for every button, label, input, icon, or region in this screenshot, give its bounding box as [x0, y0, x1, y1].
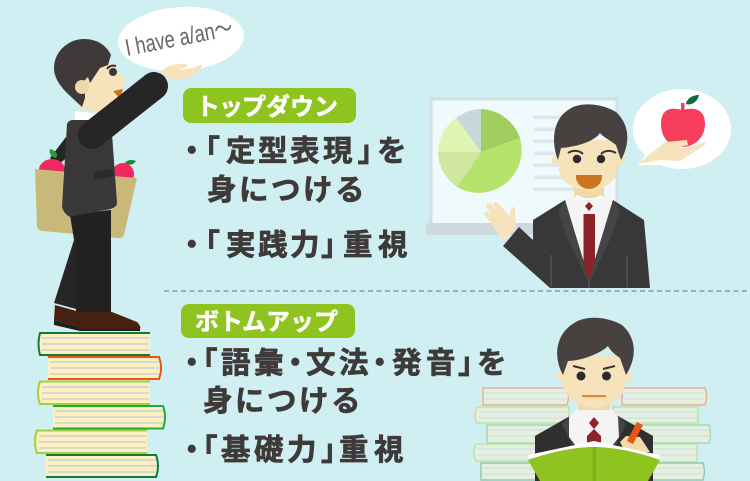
text block: top down points: ・「定型表現」を [177, 135, 407, 168]
apples in basket [39, 149, 136, 185]
text block: bottom up points: ・「基礎力」重視 [177, 434, 404, 467]
open book [528, 441, 660, 459]
reading man suit [535, 416, 653, 481]
reading man head [578, 395, 610, 410]
presenter waving hand [485, 202, 516, 241]
text block: bottom up points: ・「語彙・文法・発音」を [177, 347, 507, 380]
pencil [627, 422, 643, 444]
text block: top down points: ・「実践力」重視 [177, 229, 408, 262]
illustration: presentation board with pie chart [426, 99, 617, 235]
book 5 [35, 430, 147, 453]
badge: top down: トップダウン [196, 93, 338, 121]
reading man tie [587, 417, 601, 444]
left stack [474, 388, 569, 480]
illustration: reading man with open book [528, 318, 660, 481]
badge: bottom up: ボトムアップ [195, 309, 338, 336]
raised arm [92, 86, 154, 135]
jacket [62, 120, 117, 217]
shirt collar [75, 111, 99, 120]
trousers [54, 210, 111, 312]
presenter head [574, 180, 604, 198]
text block: bottom up points: 身につける [203, 385, 361, 418]
presenter suit [503, 200, 650, 288]
text block: bottom up points [177, 347, 507, 467]
ear, face and hair [78, 63, 126, 112]
text block: top down points: 身につける [207, 174, 365, 207]
badge: top down [183, 88, 356, 123]
speech bubble: I have a/an: I have a/an〜 [123, 15, 235, 62]
book 3 [38, 382, 150, 404]
hand [620, 436, 650, 452]
right stack [613, 388, 710, 480]
book 4 [53, 406, 165, 428]
book stack under standing man [35, 333, 165, 477]
basket [35, 169, 137, 238]
shoes [54, 305, 80, 327]
badge: bottom up [181, 304, 355, 338]
speech bubble: I have a/an [116, 3, 246, 80]
book 2 [48, 357, 161, 379]
book 6 [46, 455, 158, 477]
text block: top down points [177, 135, 408, 262]
illustration: presenter man [485, 104, 650, 288]
illustration: standing man with apple basket [35, 39, 154, 331]
rear arm [50, 137, 70, 165]
pie chart [438, 109, 522, 193]
book 1 [38, 333, 150, 355]
speech bubble with apple in hand [633, 89, 731, 169]
background book stacks behind reading man [474, 388, 710, 480]
